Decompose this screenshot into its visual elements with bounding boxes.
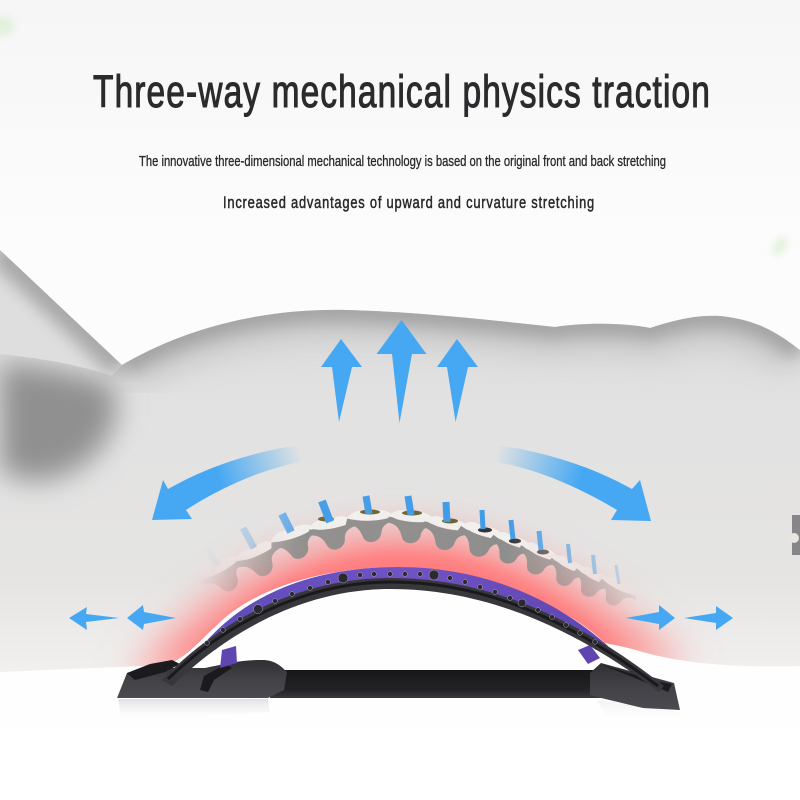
spine	[209, 495, 636, 606]
shoulder fold shadow	[0, 362, 117, 480]
arrows: small horizontal left	[69, 605, 176, 630]
arrows: three upward arrows	[321, 320, 478, 423]
left foot	[117, 660, 287, 698]
spine dark joints	[318, 510, 549, 554]
floor reflection	[118, 699, 680, 724]
black arch strip	[162, 578, 664, 692]
product: arch board	[162, 567, 664, 692]
right foot	[590, 663, 680, 710]
massage nubs	[205, 570, 597, 645]
arrow: curved left	[152, 445, 300, 520]
body silhouette	[0, 240, 800, 680]
spine vertebrae	[209, 510, 636, 606]
arch strip dark core	[168, 582, 658, 686]
subtitle line two: Increased advantages of upward and curvature stretching	[223, 194, 595, 212]
spine blue discs	[208, 496, 619, 584]
decorative leaf blurs	[0, 16, 791, 258]
arrows: small horizontal right	[626, 605, 733, 630]
product: stretcher base	[117, 660, 680, 710]
wide top shading	[122, 310, 800, 365]
purple cushion	[203, 567, 608, 650]
center bar	[270, 670, 605, 698]
left foot rough clips	[127, 660, 180, 680]
right edge object fragment	[789, 515, 800, 555]
purple supports	[220, 646, 237, 668]
red heat glow	[130, 532, 690, 680]
top edge shading	[122, 310, 800, 365]
shoulder edge shading	[0, 250, 122, 365]
shoulder flap	[0, 348, 122, 376]
arrow: curved right	[497, 445, 651, 521]
